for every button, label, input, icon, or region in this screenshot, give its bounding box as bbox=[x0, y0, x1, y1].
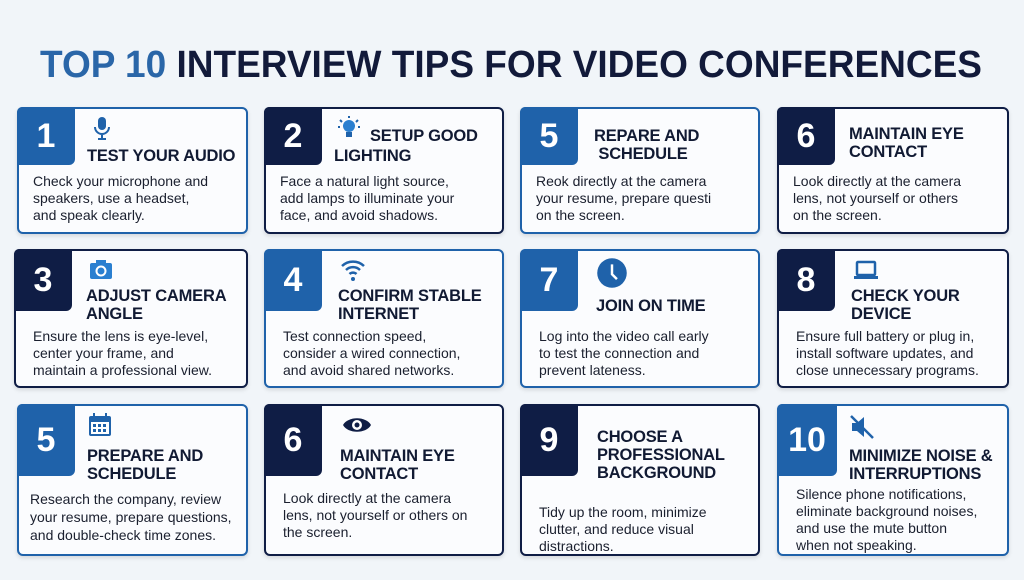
number 5: 5 bbox=[540, 116, 558, 154]
heading line 2: LIGHTING bbox=[334, 147, 411, 165]
number 6 bbox=[264, 404, 322, 476]
heading: MINIMIZE NOISE & bbox=[849, 447, 992, 465]
heading: SCHEDULE bbox=[598, 145, 688, 163]
icon: bulb bbox=[338, 116, 360, 137]
body bbox=[796, 486, 977, 553]
body: the screen. bbox=[283, 524, 352, 540]
heading: DEVICE bbox=[851, 305, 911, 323]
number 8: 8 bbox=[797, 260, 815, 298]
number 6: 6 bbox=[284, 420, 302, 458]
icon: laptop bbox=[854, 260, 878, 279]
body bbox=[283, 328, 460, 378]
heading: PROFESSIONAL bbox=[597, 446, 725, 464]
body: eliminate background noises, bbox=[796, 503, 977, 519]
icon: camera bbox=[90, 260, 112, 279]
heading bbox=[851, 287, 960, 323]
body bbox=[793, 173, 962, 223]
body: Reok directly at the camera bbox=[536, 173, 706, 189]
body: Silence phone notifications, bbox=[796, 486, 966, 502]
heading: ADJUST CAMERA bbox=[86, 287, 226, 305]
icon: clock bbox=[597, 258, 627, 288]
card 6b: eye contact bbox=[264, 404, 504, 556]
heading bbox=[597, 428, 725, 482]
body: Look directly at the camera bbox=[793, 173, 961, 189]
body: Ensure full battery or plug in, bbox=[796, 328, 974, 344]
body: Check your microphone and bbox=[33, 173, 208, 189]
heading: CONFIRM STABLE bbox=[338, 287, 482, 305]
body: clutter, and reduce visual bbox=[539, 521, 694, 537]
body: maintain a professional view. bbox=[33, 362, 212, 378]
body: Tidy up the room, minimize bbox=[539, 504, 707, 520]
body: when not speaking. bbox=[796, 537, 917, 553]
body: and avoid shared networks. bbox=[283, 362, 454, 378]
card 7: join on time bbox=[520, 249, 760, 388]
heading: BACKGROUND bbox=[597, 464, 716, 482]
heading: MAINTAIN EYE bbox=[340, 447, 455, 465]
heading: CHECK YOUR bbox=[851, 287, 960, 305]
number 6 bbox=[777, 107, 835, 165]
number 7: 7 bbox=[540, 260, 558, 298]
heading bbox=[340, 447, 455, 483]
number 4: 4 bbox=[284, 260, 302, 298]
heading bbox=[338, 287, 482, 323]
card 5a: prepare bbox=[520, 107, 760, 234]
body bbox=[280, 173, 454, 223]
card 3: camera angle bbox=[14, 249, 248, 388]
number 9: 9 bbox=[540, 420, 558, 458]
body: prevent lateness. bbox=[539, 362, 646, 378]
card 8: device bbox=[777, 249, 1009, 388]
heading: INTERNET bbox=[338, 305, 419, 323]
number 9 bbox=[520, 404, 578, 476]
number 5 bbox=[17, 404, 75, 476]
icon: wifi bbox=[341, 260, 365, 281]
body: consider a wired connection, bbox=[283, 345, 460, 361]
body: to test the connection and bbox=[539, 345, 699, 361]
heading bbox=[594, 127, 699, 163]
body: Ensure the lens is eye-level, bbox=[33, 328, 208, 344]
heading: REPARE AND bbox=[594, 127, 699, 145]
body bbox=[283, 490, 467, 540]
heading: JOIN ON TIME bbox=[596, 297, 705, 315]
heading: MAINTAIN EYE bbox=[849, 125, 964, 143]
body bbox=[796, 328, 979, 378]
body: lens, not yourself or others bbox=[793, 190, 958, 206]
body: on the screen. bbox=[793, 207, 882, 223]
heading: CONTACT bbox=[849, 143, 927, 161]
number 10: 10 bbox=[788, 420, 826, 458]
body: Research the company, review bbox=[30, 491, 221, 507]
heading: INTERRUPTIONS bbox=[849, 465, 981, 483]
heading bbox=[87, 447, 203, 483]
body bbox=[33, 328, 212, 378]
body: Look directly at the camera bbox=[283, 490, 451, 506]
number 8 bbox=[777, 249, 835, 311]
number 5 bbox=[520, 107, 578, 165]
body: and speak clearly. bbox=[33, 207, 145, 223]
heading: CONTACT bbox=[340, 465, 418, 483]
card 2: lighting bbox=[264, 107, 504, 234]
heading: ANGLE bbox=[86, 305, 143, 323]
icon: eye bbox=[343, 418, 371, 432]
body: Log into the video call early bbox=[539, 328, 709, 344]
icon: mute bbox=[850, 415, 874, 439]
body: install software updates, and bbox=[796, 345, 973, 361]
card 10: noise bbox=[777, 404, 1009, 556]
icon: calendar bbox=[89, 413, 111, 436]
body: Face a natural light source, bbox=[280, 173, 449, 189]
heading: SCHEDULE bbox=[87, 465, 176, 483]
icon: microphone bbox=[94, 117, 110, 140]
heading bbox=[849, 125, 964, 161]
card 1: test audio bbox=[17, 107, 248, 234]
body: add lamps to illuminate your bbox=[280, 190, 454, 206]
body bbox=[30, 491, 232, 543]
body: your resume, prepare questi bbox=[536, 190, 711, 206]
card 9: background bbox=[520, 404, 760, 556]
card 5b: prepare bbox=[17, 404, 248, 556]
number 3 bbox=[14, 249, 72, 311]
heading: CHOOSE A bbox=[597, 428, 683, 446]
body: Test connection speed, bbox=[283, 328, 426, 344]
body: speakers, use a headset, bbox=[33, 190, 189, 206]
number 4 bbox=[264, 249, 322, 311]
heading: TEST YOUR AUDIO bbox=[87, 147, 235, 165]
heading bbox=[86, 287, 226, 323]
card 4: internet bbox=[264, 249, 504, 388]
body bbox=[536, 173, 711, 223]
body: and use the mute button bbox=[796, 520, 947, 536]
body bbox=[539, 328, 709, 378]
number 3: 3 bbox=[34, 260, 52, 298]
body: lens, not yourself or others on bbox=[283, 507, 467, 523]
body: face, and avoid shadows. bbox=[280, 207, 438, 223]
body: center your frame, and bbox=[33, 345, 174, 361]
number 10 bbox=[777, 404, 837, 476]
body: distractions. bbox=[539, 538, 614, 554]
number 1: 1 bbox=[37, 116, 55, 154]
heading: PREPARE AND bbox=[87, 447, 203, 465]
number 2 bbox=[264, 107, 322, 165]
number 6: 6 bbox=[797, 116, 815, 154]
number 7 bbox=[520, 249, 578, 311]
body bbox=[539, 504, 707, 554]
body: close unnecessary programs. bbox=[796, 362, 979, 378]
body: on the screen. bbox=[536, 207, 625, 223]
body: and double-check time zones. bbox=[30, 527, 216, 543]
body bbox=[33, 173, 208, 223]
number 2: 2 bbox=[284, 116, 302, 154]
title: TOP 10 INTERVIEW TIPS FOR VIDEO CONFERENCES bbox=[40, 44, 982, 86]
number 1 bbox=[17, 107, 75, 165]
heading bbox=[849, 447, 992, 483]
heading: SETUP GOOD bbox=[370, 127, 478, 145]
number 5: 5 bbox=[37, 420, 55, 458]
body: your resume, prepare questions, bbox=[30, 509, 232, 525]
card 6a: eye contact bbox=[777, 107, 1009, 234]
